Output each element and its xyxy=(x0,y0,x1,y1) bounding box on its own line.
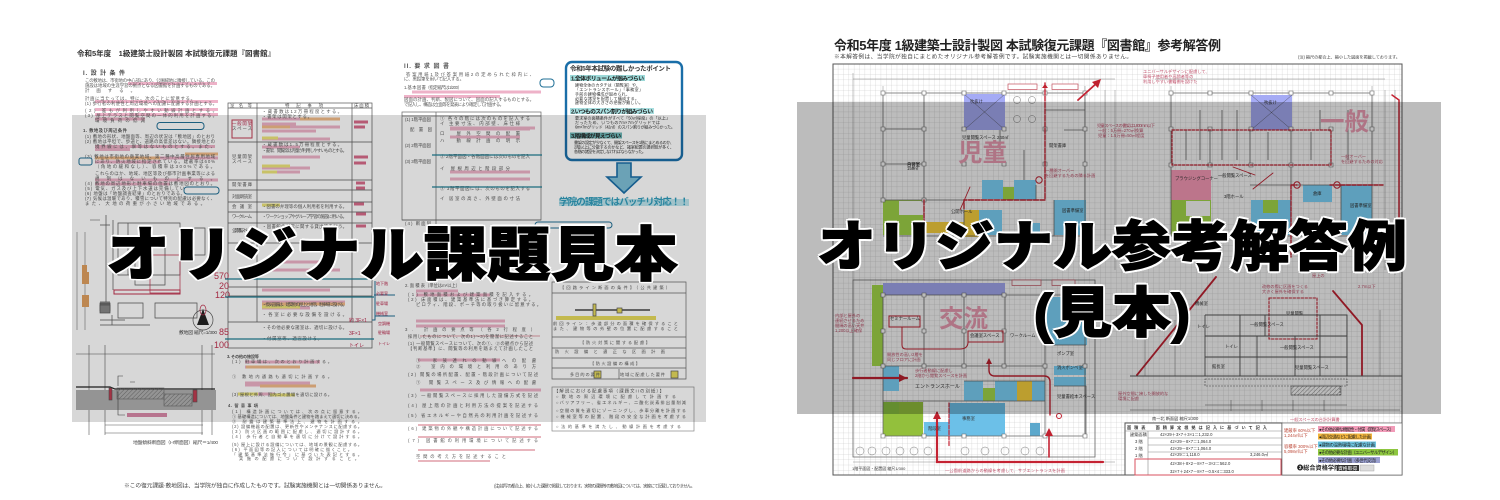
lower requirement text xyxy=(405,282,541,461)
table highlights: 約 3F×1 xyxy=(349,317,367,324)
plan labels: 消火ボンベ室 xyxy=(1057,364,1083,371)
legend: 建蔽率 60%以下 xyxy=(1284,427,1316,434)
requirements column: で記入し、構造は立面等を発表により確定して計画する。 xyxy=(404,101,504,108)
plan labels: ブラウジングコーナー xyxy=(1175,175,1218,182)
table highlights: ・換気設備は、建築物の屋上と地階、駐車場に設ける。 xyxy=(262,301,347,308)
lower requirement text: 【判断基準】に、閲覧等の利用を踏まえて計画したこと xyxy=(408,345,533,352)
section 1 design conditions: (3) 敷地は市街地の商業地域、第二種中高層住居専用地域 xyxy=(85,153,216,160)
red annotations: 同じフロアに計画 xyxy=(887,356,921,363)
site plan label: 敷地図 縮尺=1/300 xyxy=(179,329,217,336)
left document: original exam sample: 【防火設備の構成】 xyxy=(590,360,640,367)
lower requirement text: 3. 計画の要点等（各2行程度） xyxy=(405,326,535,333)
section 1 design conditions: (6) 地盤は「地盤調査結果」のとおりである。 xyxy=(85,190,185,197)
point 3: 各階の諸室を決定しなければならなかった。 xyxy=(574,148,646,154)
lower requirement text: 空間の考え方を記述すること xyxy=(416,453,506,460)
plan labels: 児童閲覧スペース 240㎡ xyxy=(962,134,1009,141)
dimension lines xyxy=(853,73,1395,462)
plan labels: 児童書絵本スペース xyxy=(1057,393,1095,400)
other conditions column: 4. 留 意 事 項 xyxy=(228,402,259,409)
plan labels: 自習室 xyxy=(907,161,921,168)
area calculation table: 42×29－8×7＝1,064.0 xyxy=(1170,439,1212,444)
table highlights: 空調機 xyxy=(378,320,390,326)
section 1 design conditions: I. 設 計 条 件 xyxy=(83,69,125,77)
lower requirement text: ① 家族連れの動線への配慮 xyxy=(416,357,537,364)
point 2: 要求室の面積条件がすべて「50㎡程度」の「以上」 xyxy=(575,114,670,120)
table highlights: 必要室 xyxy=(376,290,388,296)
red annotations: 大きく屋外を確保する xyxy=(1262,288,1304,295)
site section drawing xyxy=(76,345,216,435)
red zone lines and arrows xyxy=(853,82,1399,462)
legend: 資格取得 xyxy=(1338,465,1357,472)
lower requirement text: (5) 省エネルギーや自然光の利用計画を記述する xyxy=(408,412,538,419)
area calculation table: 1 階 xyxy=(1135,452,1143,459)
plan labels: エントランスホール xyxy=(915,384,960,390)
section 1 design conditions: この敷地は、市街地の中心部にあり、公園緑地に隣接している。この xyxy=(85,77,215,84)
red annotations: 屋上の xyxy=(1312,272,1325,279)
2F and 3F floor plan coloured rooms xyxy=(883,94,1372,237)
floor plan walls xyxy=(853,93,1383,457)
requirements column: 1. 基 本 図 書（指定縮尺は1/200） xyxy=(404,84,462,91)
red annotations: 一般オーバー xyxy=(1341,153,1366,160)
requirements column: 図面の計画、判断、製図について、図面の記入するものとする。 xyxy=(404,96,534,103)
requirements column: (3) 3階平面図 xyxy=(405,158,432,165)
plan labels: トイレ xyxy=(1225,344,1238,349)
zone labels: children, general, exchange xyxy=(939,108,1369,333)
red annotations: 一般：5万冊=270㎡換算 xyxy=(1098,127,1143,134)
callout: school task matches: 学院の課題ではバッチリ対応！！ xyxy=(559,196,689,208)
area calculation table: 3 階 xyxy=(1135,438,1143,445)
lower requirement text: ① 閲覧スペース及び情報への配慮 xyxy=(416,379,537,386)
legend: ●その他必要な機能性・付属（開架スペース） xyxy=(1319,426,1394,433)
area calculation table: 42×29＝1,118.0 xyxy=(1170,452,1200,457)
other conditions column: 「建築基準法施行令」に基づいた表記とする。 xyxy=(232,451,362,458)
table highlights: 公開閲覧スペース xyxy=(232,227,252,234)
other conditions column: (1) 構造計画については、次の点に留意する。 xyxy=(232,408,362,415)
table highlights: ・蔵書数は1.5万冊程度とする。 xyxy=(262,141,342,148)
plan labels: 150㎡ xyxy=(907,165,919,171)
table highlights: 会議室 xyxy=(232,203,253,210)
section drawing xyxy=(1130,310,1402,411)
requirements column: ② 2階平面図・各階面図には次のものを記入 xyxy=(440,153,531,160)
document title: 令和5年度 1級建築士設計製図 本試験復元課題『図書館』参考解答例 xyxy=(834,38,1221,53)
left document: original exam sample: また、建物等の外壁の位置に配慮すること xyxy=(553,325,678,332)
note: ※本解答例は、当学院が独自にまとめたオリジナル参考解答例です。試験実施機関とは一切関係ありません。 xyxy=(834,52,1132,60)
table highlights: ・書架は開架とする。 xyxy=(262,113,312,120)
section 1 design conditions: 境界線には、塀等はないものとする。また、 xyxy=(95,143,215,150)
school logo: ❷総合資格学院 xyxy=(1297,464,1341,472)
table highlights: ワークルーム xyxy=(232,214,253,220)
grey translucent panel left xyxy=(72,115,706,422)
area calculation table: 42×38＋8×2－8×7－3×2＝562.0 xyxy=(1170,461,1231,466)
table highlights: ・各室に必要な設備を設ける。 xyxy=(262,311,347,318)
legend xyxy=(1282,423,1402,475)
section 1 design conditions: 規制はないものとする。 xyxy=(95,175,215,182)
table highlights: ・図書の弁理等の個人利用者を利用する。 xyxy=(262,203,347,210)
section 1 design conditions: また、大地の荷重が小さい地域である。 xyxy=(85,200,205,207)
zone labels: children, general, exchange: 児童 xyxy=(958,139,1007,167)
table highlights: スペース xyxy=(232,159,252,164)
plan labels: トイレ xyxy=(1197,324,1210,329)
table highlights: スペース xyxy=(232,126,252,131)
point 1: 手前の建物構成が固められ、 xyxy=(575,90,630,96)
plan labels: ワークルーム xyxy=(1010,333,1036,339)
other conditions column xyxy=(227,353,362,462)
plan labels: セミナールーム xyxy=(890,316,921,322)
requirements column: 配置図 xyxy=(410,127,433,133)
table highlights: 駐車場 xyxy=(376,300,388,306)
section 1 design conditions: (2) 敷地は平坦で、歩道と、道路の高低差はない。隣接地との xyxy=(85,138,215,145)
point 2: だったため、いつもの7m×7mグリッドでは xyxy=(575,119,660,125)
table highlights: 一般開架 xyxy=(232,120,253,127)
left document: original exam sample: 多目的の要件 xyxy=(570,371,600,378)
callout: difficult points blue box xyxy=(566,62,682,160)
legend: ●その他必要な計画（ユニバーサルデザイン） xyxy=(1319,449,1397,456)
table highlights: 3F×1 xyxy=(349,331,361,337)
area calculation table: 面積表 面積算定根拠は記入に基づいて記入 xyxy=(1127,424,1268,431)
red annotations: 改修の際に区画をつくる xyxy=(1262,283,1308,290)
red margin numbers xyxy=(214,271,230,350)
structural columns xyxy=(881,91,1374,438)
table highlights: ・蔵書数は12万冊程度とする。 xyxy=(262,108,342,115)
other conditions column: 実施の配慮について設計すること。 xyxy=(239,455,359,462)
red annotations: 2階から閲覧スペースを計画 xyxy=(915,372,967,379)
table highlights: 開架書庫 xyxy=(232,181,253,188)
requirements column: イ 居室の高さ、外壁面の寸法 xyxy=(440,195,521,202)
section label: 地盤傾斜断面図（I-I′断面図）縮尺＝1/400 xyxy=(133,439,218,446)
plan labels: 倉庫 xyxy=(1313,190,1322,197)
section 1 design conditions: (1) 歩行者の利便性と周辺環境への配慮に配慮する計画とする。 xyxy=(85,100,217,107)
right document: reference answer xyxy=(833,38,1402,475)
red annotations: 1,200以上確保 xyxy=(835,327,863,334)
lower requirement text: (4) 屋上階の計画と利用方法の提案を記述する xyxy=(408,402,538,409)
red margin numbers: 120 xyxy=(215,290,230,300)
point 1: 必要な諸室を配置して構成する。 xyxy=(575,95,639,101)
left document: original exam sample: 【回路ライン断面の条件】（公共建築） xyxy=(560,284,670,291)
lower requirement text: ピロティ、階段、ポーチ等の取り扱いに留意する。 xyxy=(416,301,541,308)
red annotations: を回避するための対応 xyxy=(1341,158,1384,165)
left document: original exam sample: ○敷地の周辺環境に配慮して計画する xyxy=(556,393,676,400)
requirements column: 答案用紙1及び答案用紙2の定められた枠内に、 xyxy=(406,71,534,78)
red margin numbers: 20 xyxy=(219,281,229,291)
legend: ●その他必要な計画（多世代交流） xyxy=(1319,457,1379,464)
plan labels: 館長室 xyxy=(1212,363,1226,370)
area calculation table: 建築面積 xyxy=(1130,431,1148,438)
plan labels: 会議室スペース xyxy=(970,332,1000,339)
section 1 design conditions: 環境負荷の低減 xyxy=(95,117,146,124)
lower requirement text: (1) 一般閲覧スペースについて、次の①、②の観点から記述 xyxy=(408,340,534,347)
lower requirement text: (3) 一般閲覧スペースに採用した設備方式を記述 xyxy=(408,392,539,399)
table highlights: 室名等 xyxy=(230,102,253,109)
table highlights xyxy=(214,102,395,350)
big heading left: original exam sample: オリジナル課題見本 xyxy=(106,223,678,288)
other conditions column: ② 耐震は建築基準法上、建物を計画する。 xyxy=(232,418,362,425)
site plan drawing xyxy=(77,215,213,330)
table highlights: トイレ xyxy=(349,343,364,349)
plan labels: 図書準備室 xyxy=(1062,207,1084,214)
legend: 5,098㎡以下 xyxy=(1284,448,1308,455)
requirements column: ③ 3階平面図には、次のものを記入する xyxy=(440,185,530,192)
lower requirement text: (2) 床面積は、建築基準法に基づき算定する。 xyxy=(408,296,533,303)
red margin numbers: 570 xyxy=(214,271,229,281)
red annotations: 一公園前道路からの動線を考慮して、サブエントランスを計画 xyxy=(945,467,1065,474)
plan labels: 公開ホール xyxy=(951,208,973,215)
point 2 xyxy=(570,108,675,130)
red callouts top xyxy=(1008,84,1078,286)
table highlights: ・書架、閲覧席は児童が利用しやすいものとする。 xyxy=(262,147,347,154)
red annotations: 間隔の高い天井 xyxy=(835,322,864,329)
area calculation table: 42×29－8×7＝1,064.0 xyxy=(1170,446,1212,451)
document title: 令和5年度 1級建築士設計製図 本試験復元課題『図書館』 xyxy=(77,48,275,58)
section 1 design conditions: （角地の緩和なし）、容積率は300%である。 xyxy=(95,163,215,170)
section 1 design conditions: 計画に当たっては、特に、次のことに留意する。 xyxy=(85,95,195,102)
red annotations: ユニバーサルデザインに配慮して、 xyxy=(1143,68,1210,75)
table highlights: ・図書館の運営に関する貸出等を行う。 xyxy=(262,223,347,230)
section 1 design conditions: (1) 敷地の形状、地盤面等、周辺の状況は「敷地図」のとおり xyxy=(85,133,215,140)
red annotations: 利用しやすい書籍棚を設けた xyxy=(1143,78,1197,85)
other conditions column: (1) 駐車場は、次のとおり計画する。 xyxy=(232,358,332,365)
point 1 xyxy=(570,74,645,105)
left document: original exam sample xyxy=(76,48,695,490)
point 3: 書架の設定が少なくて、開架スペースを1階にまとめるのか、 xyxy=(574,139,674,145)
other conditions column: (2) 設備機器の配置は、更新性やメンテナンスに配慮する。 xyxy=(232,423,362,430)
other conditions column: (3) 屋根と外周、国内ゴミ置場を適切に設ける。 xyxy=(232,391,332,398)
section 1 design conditions: にあり、防火地域に指定されている。建蔽率は60% xyxy=(95,158,215,165)
point 1: 1.全体ボリュームが掴みづらい xyxy=(571,74,644,82)
red annotations: 環境に配慮 xyxy=(1118,395,1139,402)
teal rule lines xyxy=(225,279,374,339)
table highlights: ・その他必要な諸室は、適切に設ける。 xyxy=(262,324,347,331)
lower requirement text: 採用したものについて、次の1)～3)を簡潔に記述すること xyxy=(408,333,533,340)
requirements column: ① 各々の階には次のものを記入する xyxy=(440,115,530,122)
checkpoint table lower right xyxy=(552,282,694,431)
red annotations: 車椅子使用者や高齢者等の xyxy=(1143,73,1193,80)
section 1 design conditions: (5) 電気、ガス及び上下水道は完備している。 xyxy=(85,185,195,192)
requirements column xyxy=(402,62,612,228)
lower requirement text: (1) 敷地面積および建築面積を記入する。 xyxy=(408,291,533,298)
lower requirement text: ② 室内の環境と利用のあり方 xyxy=(416,363,537,370)
red annotations: 児童スペースの書架は1,800mm以下 xyxy=(1097,122,1155,129)
requirements column: (4) 断面図 xyxy=(405,220,432,227)
left document: original exam sample: 地域に配慮した要件 xyxy=(620,371,665,378)
big heading right: original reference answer (sample): オリジナル参考解答例 xyxy=(817,217,1407,277)
plan labels: 図書準備室 xyxy=(1350,202,1372,209)
big heading right: original reference answer (sample) xyxy=(817,216,1407,346)
red annotations: 内部と屋外の xyxy=(835,312,860,319)
plan labels xyxy=(890,98,1372,432)
requirements column: (1) 1階平面図 xyxy=(405,116,432,123)
room table xyxy=(228,103,372,348)
1F floor plan coloured rooms xyxy=(872,283,1087,436)
lower requirement text: (2) 閲覧の場所配置、配置・階段計画について記述 xyxy=(408,371,539,378)
area calculation table: 3,246.0㎡ xyxy=(1250,451,1269,457)
section 1 design conditions: (2) 誰もが利用しやすい動線計画とする。 xyxy=(85,107,217,114)
lower requirement text: (6) 建築物の外観や構造計画について記述する xyxy=(408,425,538,432)
other conditions column: (3) 防火区画の範囲に配慮し、適切に設計する。 xyxy=(232,428,362,435)
section 1 design conditions: 計画する。 xyxy=(85,87,135,94)
icon: down arrow xyxy=(607,163,641,193)
other conditions column: ① 敷地内通路も適切に計画する。 xyxy=(232,373,332,380)
big heading right: original reference answer (sample): (見本) xyxy=(1033,283,1191,344)
section 1 design conditions: (4) 敷地の周辺地形と駐車場の位置は敷地図のとおり。 xyxy=(85,180,215,187)
point 2: 6m×7mグリッド（42㎡）のスパン割りが組みづらかった。 xyxy=(575,124,675,130)
point 1: 建物全体の大きさの把握が難しい。 xyxy=(575,99,643,105)
section 1 design conditions: 施設は地域の生涯学習の拠点となる図書館を計画するものである。 xyxy=(85,82,215,89)
area calculation table: 32×7＋24×7－8×7－0.5×4＝333.0 xyxy=(1170,469,1234,474)
requirements column: イ 主要寸法、内部壁、床仕様 xyxy=(440,120,521,127)
grey translucent panel right xyxy=(797,102,1441,414)
left document: original exam sample: 前回ライン：歩道部分の面積を確保すること xyxy=(553,320,678,327)
red annotations: 連続させるため xyxy=(835,317,864,324)
zone labels: children, general, exchange: 一般 xyxy=(1320,108,1369,136)
point 3: 3.階構成が見えづらい xyxy=(571,132,621,140)
red annotations: 児童：1.5万冊=50㎡程度 xyxy=(1098,132,1145,139)
lower requirement text: 2. 面 積 表（単位はm²以上） xyxy=(405,282,460,289)
requirements column: ハ 動線計画の明示 xyxy=(440,137,521,144)
table highlights: ・付属室等、適宜設ける。 xyxy=(262,335,322,342)
zone labels: children, general, exchange: 交流 xyxy=(939,305,988,333)
plan labels: 事務室 xyxy=(962,415,976,422)
red annotations: 開放性の高い2層を xyxy=(887,351,923,358)
left document: original exam sample: 防火設備と適正な区画計画 xyxy=(555,348,665,355)
arrowheads xyxy=(899,79,1101,436)
table highlights: 機械室 xyxy=(376,310,388,316)
other conditions column: 3. その他の施設等 xyxy=(227,353,259,360)
red annotations: 屋外空間に接した開放的な xyxy=(1118,390,1168,397)
table highlights: 児童開架 xyxy=(232,153,253,160)
right document: reference answer: (注) 縮尺の都合上、縮小した図面を掲載しております。 xyxy=(1298,54,1400,60)
red annotations: 一般スペースの合計計算書 xyxy=(1290,416,1340,423)
plan labels: 児童閲覧 xyxy=(1286,310,1304,317)
legend: ●建物の温熱環境に配慮な計画 xyxy=(1319,442,1376,448)
point 3: 2階以上に分散するのかなど、諸室配置の選択肢が多く、 xyxy=(574,144,674,150)
requirements column: に、黒鉛筆を用いて記入する。 xyxy=(404,76,464,82)
red annotations xyxy=(835,68,1384,474)
plan labels: 開架書庫 xyxy=(1049,142,1067,149)
table highlights: 対面朗読室 xyxy=(232,193,253,200)
red annotations: 2.7m以下 xyxy=(1358,284,1376,290)
red margin numbers: 85 xyxy=(219,327,229,337)
drawing sheet with grid xyxy=(833,64,1402,475)
left footnotes: ※この復元課題·敷地図は、当学院が独自に作成したものです。試験実施機関とは一切関係ありません。 xyxy=(124,482,386,490)
table highlights: トイレ xyxy=(378,341,390,346)
requirements column: ロ 屋外空間の配置 xyxy=(440,130,521,137)
box heading: 令和5年本試験の難しかったポイント xyxy=(570,64,671,72)
legend: 容積率 300%以下 xyxy=(1284,443,1318,450)
section 1 design conditions xyxy=(83,69,218,207)
point 3 xyxy=(570,132,674,154)
section 1 design conditions: これらのほか、地域、地区等及び都市計画事業等による xyxy=(95,170,215,177)
left document: original exam sample: (注) 描写の都合上、縮小した課題で掲載しております。実物の課題等の敷地図については、実線にて記載しておりません。 xyxy=(494,482,695,490)
left document: original exam sample: 【解説における配慮事項（課題文IIの別紙）】 xyxy=(554,388,664,394)
left document: original exam sample: 【防火対策に関する配慮】 xyxy=(580,339,650,346)
red annotations: を回避するための隣る計画 xyxy=(1045,172,1095,179)
plan labels: 吹抜け xyxy=(970,98,983,105)
section 1 design conditions: (7) 気候は温暖であり、積雪について特別の配慮は必要なく、 xyxy=(85,195,215,202)
left document: original exam sample: ○法的基準を満たし、動線計画を考慮する xyxy=(556,423,681,430)
requirements column: (2) 2階平面図 xyxy=(405,142,432,149)
table highlights: ・ワークショップやグループ学習の施設に用いる。 xyxy=(262,213,347,220)
section 1 design conditions: (3) 屋上テラスと閲覧空間の一体的利用を計画する。 xyxy=(85,112,217,119)
point 2: 2.いつものスパン割りが組みづらい xyxy=(571,108,653,116)
plan labels: 一般閲覧スペース xyxy=(1218,172,1252,179)
left document: original exam sample: ○機械室等の配置、階段の安全な計画を考慮する xyxy=(556,413,686,420)
other conditions column: (4) 歩行者と自動車を適切に分けて設計する。 xyxy=(232,433,362,440)
tree row at the south edge xyxy=(856,96,1044,455)
other conditions column: (5) 屋上に設ける設備については、地域の景観に配慮する。 xyxy=(232,441,362,448)
table highlights: 床面積 xyxy=(354,102,370,109)
other conditions column: (6) 平面図等の記入については明確に描くこと。 xyxy=(232,446,352,453)
plan labels: 一般閲覧スペース xyxy=(1280,344,1314,351)
table highlights: 特 記 事 項 xyxy=(285,102,324,109)
point 1: 「エントランスホール」「事務室」 xyxy=(575,86,643,92)
red annotations: 一層開オーバー xyxy=(1045,168,1074,174)
plan labels: 3階ホール xyxy=(1224,193,1244,200)
point 1: 建物全体のカタチは（閲覧室）や、 xyxy=(575,82,640,88)
other conditions column: ① 基礎構造については、地盤条件と建物を踏まえて適切に決める。 xyxy=(232,413,362,420)
legend: ●周辺交通などに配慮した計画 xyxy=(1319,434,1372,440)
red annotations: 歩行者動線に配慮し xyxy=(915,367,953,374)
table highlights: 駐輪場 xyxy=(378,329,390,335)
table highlights: 地下階 xyxy=(376,280,388,286)
requirements column: II. 要 求 図 書 xyxy=(404,62,449,70)
plan labels: 吹抜け xyxy=(1264,99,1277,106)
area calculation table xyxy=(1125,423,1282,475)
plan labels: 一般閲覧スペース xyxy=(1250,321,1284,328)
plan labels: 機械室 xyxy=(1195,300,1209,307)
left document: original exam sample: ○バリアフリー、省エネルギー、二酸化炭素排出量削減 xyxy=(556,399,687,406)
plan labels: ポンプ室 xyxy=(1057,350,1075,357)
plan labels: 児童閲覧スペース xyxy=(1295,364,1329,371)
callout: blue rounded notes xyxy=(79,122,219,194)
plan labels: 階段室 xyxy=(928,425,942,432)
section 1 design conditions: 1. 敷地及び周辺条件 xyxy=(83,127,128,134)
left document: original exam sample: ○空間の質を適切にゾーニングし、歩車分離を計画する xyxy=(556,407,686,414)
area calculation table: 2 階 xyxy=(1135,445,1143,452)
right document: reference answer: 1階平面図・配置図 縮尺1/300 xyxy=(852,465,906,471)
right document: reference answer: 南一北 断面図 縮尺1/300 xyxy=(1152,415,1199,422)
lower requirement text: (7) 図書館の利用環境について記述する xyxy=(408,437,538,444)
red margin numbers: 100 xyxy=(214,340,229,350)
area calculation table: 42×29＋3×7＋3×1＝1,232.0 xyxy=(1160,432,1213,437)
legend: 1,244㎡以下 xyxy=(1284,432,1308,439)
requirements column: イ 屋根周辺と階段部分 xyxy=(440,165,511,172)
